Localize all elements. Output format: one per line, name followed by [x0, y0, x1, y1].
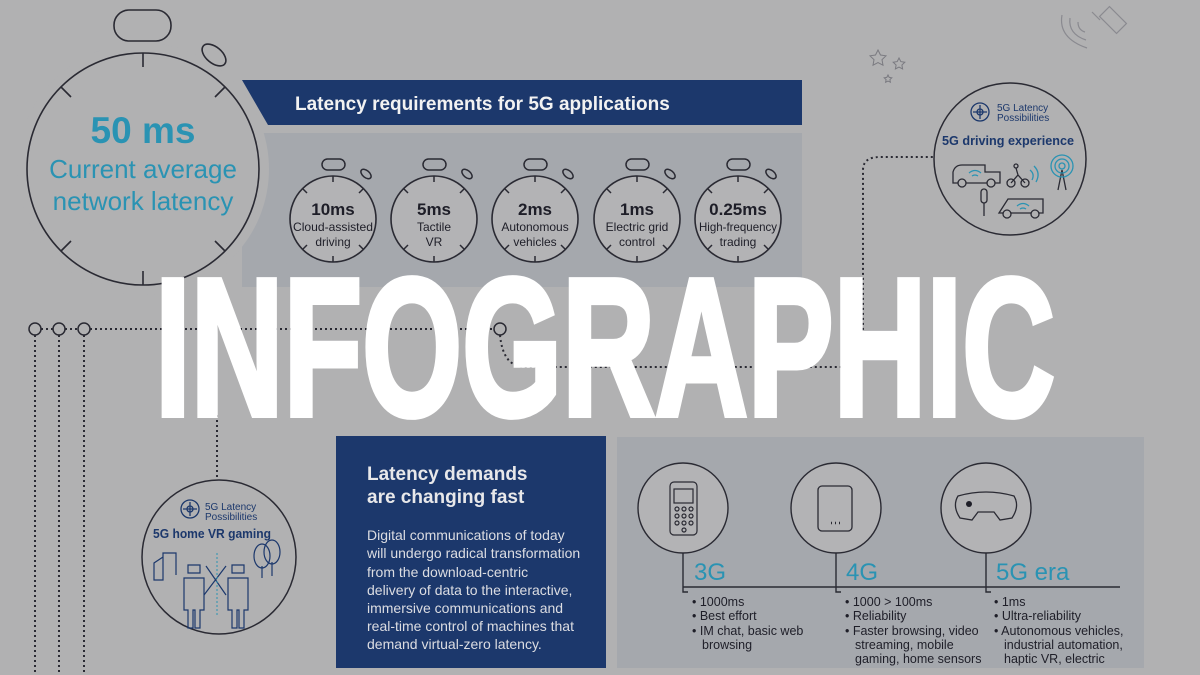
- panel: latency requirements: [242, 80, 802, 287]
- dotted connectors: [35, 157, 934, 675]
- title bar: [242, 80, 802, 125]
- stopwatch: 0.25ms: High-frequency: [699, 220, 777, 234]
- panel: latency demands text box: from the download-centric: [367, 564, 528, 580]
- icon: stars: [870, 50, 905, 82]
- panel: latency demands text box: immersive communications and: [367, 600, 563, 616]
- callout: 5G driving experience: 5G driving experience: [942, 133, 1074, 148]
- callout: 5G driving experience: Possibilities: [997, 113, 1049, 124]
- panel: latency demands text box: delivery of data to the interactive,: [367, 582, 572, 598]
- big stopwatch: 50 ms: network latency: [53, 186, 233, 216]
- stopwatch: 0.25ms: 0.25ms: [709, 200, 767, 219]
- 5G era column: industrial automation,: [1004, 638, 1123, 652]
- 4G column: [791, 463, 981, 666]
- stopwatch: 1ms: Electric grid: [606, 220, 668, 234]
- panel: 3G / 4G / 5G timeline: [617, 437, 1144, 668]
- big stopwatch: 50 ms: Current average: [49, 154, 237, 184]
- panel: latency demands text box: demand virtual-zero latency.: [367, 636, 542, 652]
- 3G column: • Best effort: [692, 609, 757, 623]
- 3G column: 3G: [694, 559, 726, 586]
- stopwatch: 10ms: driving: [315, 235, 351, 249]
- callout: 5G home VR gaming: Possibilities: [205, 512, 257, 523]
- stopwatch: 5ms: 5ms: [417, 200, 451, 219]
- 4G column: streaming, mobile: [855, 638, 954, 652]
- stopwatch: 2ms: Autonomous: [501, 220, 569, 234]
- 5G era column: • Autonomous vehicles,: [994, 624, 1123, 638]
- 4G column: gaming, home sensors: [855, 652, 981, 666]
- 3G column: • 1000ms: [692, 595, 744, 609]
- 5G era column: • Ultra-reliability: [994, 609, 1082, 623]
- stopwatch: 10ms: Cloud-assisted: [293, 220, 373, 234]
- stopwatch: 10ms: 10ms: [311, 200, 355, 219]
- 3G column: browsing: [702, 638, 752, 652]
- panel: latency demands text box: Latency demands: [367, 464, 528, 485]
- big stopwatch: 50 ms: [17, 10, 269, 295]
- stopwatch: 1ms: [594, 159, 680, 262]
- stopwatch: 0.25ms: trading: [720, 235, 756, 249]
- 4G column: • Faster browsing, video: [845, 624, 979, 638]
- callout: 5G driving experience: [934, 83, 1086, 235]
- stopwatch: 5ms: Tactile: [417, 220, 451, 234]
- 3G column: • IM chat, basic web: [692, 624, 803, 638]
- 4G column: • 1000 > 100ms: [845, 595, 932, 609]
- icon: arrows badge: [971, 103, 989, 121]
- stopwatch: 2ms: [492, 159, 578, 262]
- 3G column: [638, 463, 803, 652]
- stopwatch: 1ms: 1ms: [620, 200, 654, 219]
- 4G column: 4G: [846, 559, 878, 586]
- stopwatch: 2ms: vehicles: [513, 235, 557, 249]
- panel: latency demands text box: are changing fast: [367, 487, 525, 508]
- panel: latency demands text box: will undergo radical transformation: [366, 545, 580, 561]
- big stopwatch: 50 ms: 50 ms: [91, 110, 195, 151]
- panel: latency demands text box: Digital communications of today: [367, 527, 565, 543]
- callout: 5G home VR gaming: 5G Latency: [205, 502, 256, 513]
- icon: vehicles: [953, 164, 1066, 218]
- panel: latency demands text box: [336, 436, 606, 668]
- panel: latency demands text box: real-time control of machines that: [367, 618, 574, 634]
- 5G era column: haptic VR, electric: [1004, 652, 1105, 666]
- callout: 5G driving experience: 5G Latency: [997, 103, 1048, 114]
- stopwatch: 10ms: [290, 159, 376, 262]
- stopwatch: 2ms: 2ms: [518, 200, 552, 219]
- icon: arrows badge: [181, 500, 199, 518]
- icon: satellite: [1062, 7, 1126, 48]
- 5G era column: [941, 463, 1123, 666]
- icon: VR players: [154, 540, 280, 628]
- 5G era column: • 1ms: [994, 595, 1025, 609]
- stopwatch: 0.25ms: [695, 159, 781, 262]
- title bar: Latency requirements for 5G applications: [295, 94, 670, 115]
- stopwatch: 5ms: [391, 159, 477, 262]
- stopwatch: 5ms: VR: [426, 235, 443, 249]
- stopwatch: 1ms: control: [619, 235, 655, 249]
- 4G column: • Reliability: [845, 609, 907, 623]
- callout: 5G home VR gaming: [142, 480, 296, 634]
- callout: 5G home VR gaming: 5G home VR gaming: [153, 526, 271, 541]
- 5G era column: 5G era: [996, 559, 1070, 586]
